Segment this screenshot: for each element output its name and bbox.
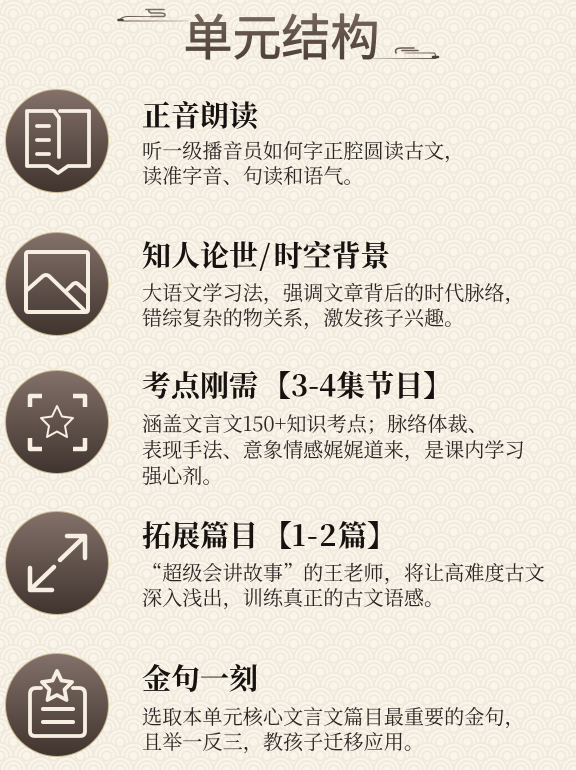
- heading: 考点刚需: 考点刚需【3-4集节目】: [142, 364, 452, 405]
- text: 知人论世 description: 错综复杂的物关系，激发孩子兴趣。: [142, 302, 464, 331]
- icon: expand arrows: [5, 511, 109, 615]
- heading: 金句一刻: 金句一刻: [142, 657, 258, 698]
- icon: clipboard star: [5, 653, 109, 757]
- text: 知人论世 description: [142, 277, 525, 331]
- text: 金句一刻 description: 选取本单元核心文言文篇目最重要的金句，: [142, 701, 525, 730]
- text: 考点刚需 description: 表现手法、意象情感娓娓道来，是课内学习: [142, 434, 525, 463]
- heading: 正音朗读: 正音朗读: [142, 94, 258, 135]
- text: 正音朗读 description: 读准字音、句读和语气。: [142, 160, 364, 189]
- title: [117, 0, 440, 70]
- heading: 拓展篇目: 拓展篇目【1-2篇】: [142, 514, 396, 555]
- text: 拓展篇目 description: 深入浅出，训练真正的古文语感。: [142, 582, 444, 611]
- title: 单元结构: [184, 0, 380, 70]
- text: 考点刚需 description: [142, 408, 525, 489]
- heading: 知人论世/时空背景: 知人论世/时空背景: [142, 234, 390, 275]
- text: 正音朗读 description: [142, 135, 464, 189]
- text: 考点刚需 description: 强心剂。: [142, 460, 223, 489]
- text: 拓展篇目 description: [142, 557, 545, 611]
- text: 考点刚需 description: 涵盖文言文150+知识考点；脉络体裁、: [142, 408, 488, 437]
- text: 正音朗读 description: 听一级播音员如何字正腔圆读古文，: [142, 135, 464, 164]
- icon: open book: [5, 89, 109, 193]
- text: 金句一刻 description: 且举一反三，教孩子迁移应用。: [142, 726, 424, 755]
- text: 拓展篇目 description: “超级会讲故事”的王老师，将让高难度古文: [142, 557, 545, 586]
- text: 金句一刻 description: [142, 701, 525, 755]
- icon: star in frame: [5, 370, 109, 474]
- icon: landscape picture: [5, 232, 109, 336]
- text: 知人论世 description: 大语文学习法，强调文章背后的时代脉络，: [142, 277, 525, 306]
